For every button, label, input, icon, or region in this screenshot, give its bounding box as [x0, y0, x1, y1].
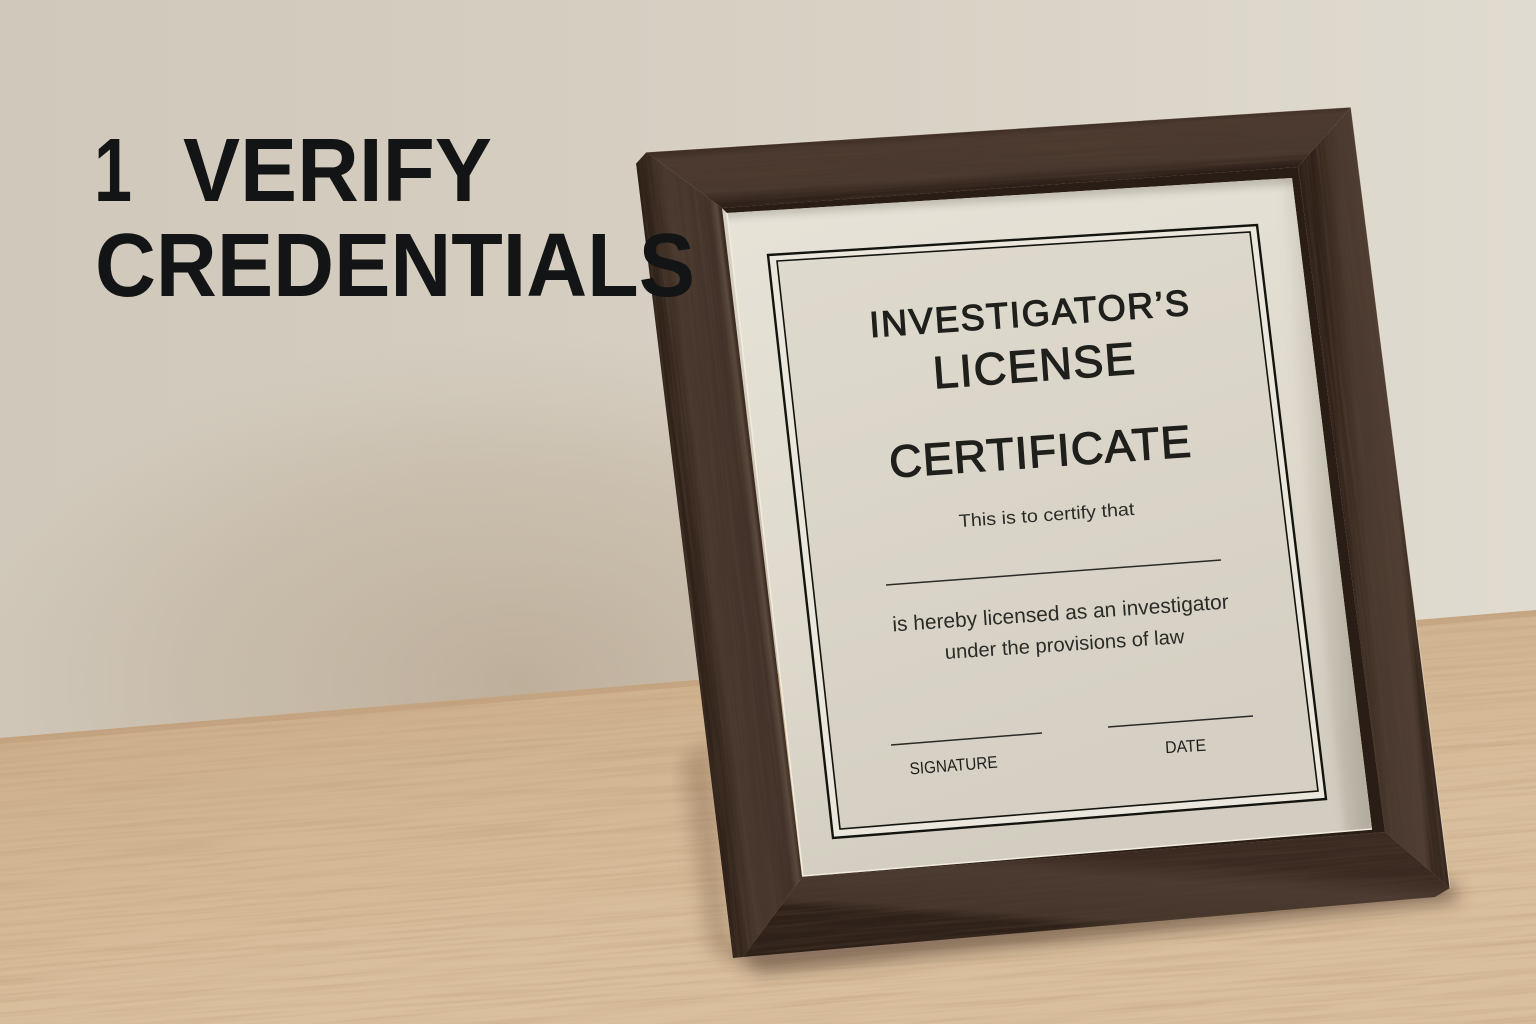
main title: 1	[94, 121, 132, 221]
certificate paper and inner border	[777, 232, 1318, 829]
provisions text: under the provisions of law	[944, 626, 1186, 664]
frame inner lip	[722, 167, 1385, 877]
certify line: This is to certify that	[958, 499, 1135, 531]
certificate heading: INVESTIGATOR’S	[868, 282, 1190, 345]
certificate license line: LICENSE	[931, 333, 1136, 398]
framed certificate	[636, 106, 1450, 958]
frame shadow on table	[682, 740, 1460, 972]
mat shadows	[720, 170, 1378, 835]
licensed text: is hereby licensed as an investigator	[892, 591, 1229, 636]
band between certificate borders	[768, 225, 1326, 838]
date label: DATE	[1165, 736, 1207, 757]
frame: bottom rail	[743, 832, 1450, 957]
frame: right rail	[1298, 107, 1450, 888]
certificate title: CERTIFICATE	[888, 416, 1192, 488]
signature label: SIGNATURE	[909, 753, 998, 778]
frame: top rail	[646, 107, 1351, 208]
wooden table	[0, 610, 1536, 1024]
main title: CREDENTIALS	[95, 216, 695, 316]
frame corner highlights	[636, 107, 1450, 888]
signature line	[891, 733, 1042, 745]
date line	[1108, 716, 1253, 727]
frame: left rail	[636, 152, 802, 958]
main title: VERIFY	[183, 121, 492, 221]
main title	[94, 121, 695, 316]
mat board	[727, 178, 1372, 876]
mat edge highlight	[727, 213, 1372, 876]
name line	[886, 560, 1221, 585]
